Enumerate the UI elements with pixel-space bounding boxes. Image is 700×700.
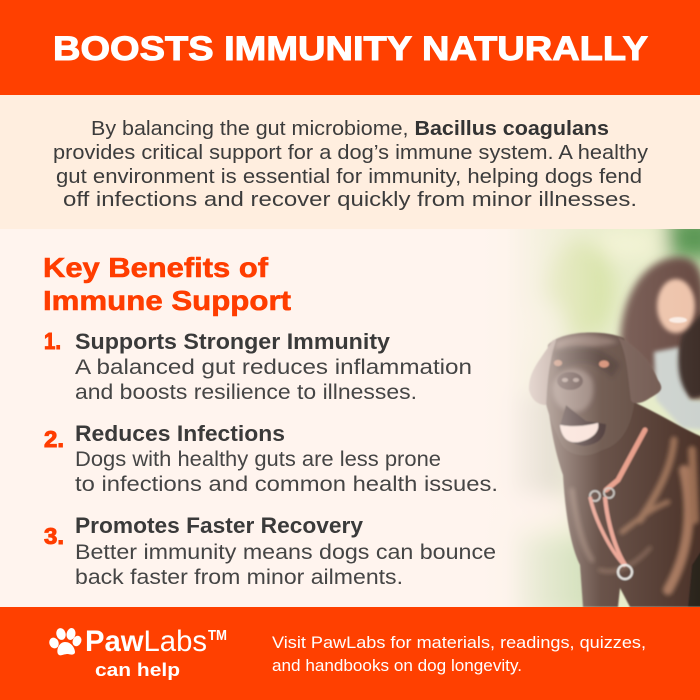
- number 2: 2.: [44, 426, 64, 452]
- leash ring: [618, 565, 632, 579]
- benefit 3 text: back faster from minor ailments.: [75, 566, 403, 589]
- footer banner: [0, 607, 700, 700]
- soft left fade overlay: [480, 229, 700, 607]
- benefits heading: [43, 252, 291, 316]
- dog: [529, 333, 700, 607]
- number 3: 3.: [44, 523, 64, 549]
- benefits heading: Key Benefits of: [43, 252, 269, 283]
- photo: dog with woman in park: [515, 229, 700, 607]
- collar rings: [590, 491, 600, 501]
- benefit 3 text: [75, 541, 496, 589]
- dark hair right: [678, 310, 700, 398]
- title: BOOSTS IMMUNITY NATURALLY: [53, 30, 648, 68]
- benefit 1 text: A balanced gut reduces inflammation: [75, 356, 472, 379]
- PawLabs logo wordmark: PawLabs: [85, 625, 207, 658]
- blurred foliage background: [528, 229, 700, 607]
- benefit 2 text: to infections and common health issues.: [75, 473, 498, 496]
- intro text: By balancing the gut microbiome, Bacillus coagulans: [91, 118, 609, 140]
- brow shading: [553, 346, 620, 378]
- benefit 2 title: Reduces Infections: [75, 421, 285, 446]
- benefit 1 text: [75, 356, 472, 404]
- icon: paw print: [48, 627, 83, 655]
- face: [657, 279, 695, 333]
- forehead highlight: [556, 335, 618, 350]
- benefit 3 title: Promotes Faster Recovery: [75, 513, 364, 538]
- top: [654, 347, 700, 430]
- number 1: 1.: [44, 328, 61, 354]
- woman: [620, 257, 700, 430]
- footer text: and handbooks on dog longevity.: [272, 656, 522, 675]
- benefit 1 title: Supports Stronger Immunity: [75, 329, 391, 354]
- benefit 2 text: Dogs with healthy guts are less prone: [75, 448, 441, 471]
- tongue: [560, 423, 598, 442]
- collar strap: [606, 430, 645, 490]
- benefits heading: Immune Support: [43, 285, 291, 316]
- muzzle: [553, 369, 593, 412]
- benefit 2 text: [75, 448, 498, 496]
- head: [544, 333, 635, 455]
- benefit 3: [44, 513, 496, 589]
- right ear: [618, 337, 661, 403]
- header banner: [0, 0, 700, 95]
- left ear: [529, 340, 556, 405]
- benefit 1 text: and boosts resilience to illnesses.: [75, 381, 417, 404]
- benefit 3 text: Better immunity means dogs can bounce: [75, 541, 496, 564]
- intro panel: [0, 95, 700, 229]
- trademark: TM: [208, 627, 227, 644]
- intro text: provides critical support for a dog’s immune system. A healthy: [53, 142, 648, 164]
- benefit 2: [44, 421, 498, 496]
- hair: [620, 257, 700, 400]
- footer text: Visit PawLabs for materials, readings, quizzes,: [272, 633, 646, 652]
- benefit 1: [44, 328, 472, 404]
- can help: can help: [95, 660, 180, 680]
- open mouth: [560, 405, 606, 446]
- intro text: [53, 118, 648, 211]
- body: [548, 400, 700, 607]
- far leg: [688, 545, 700, 607]
- intro text: gut environment is essential for immunity, helping dogs fend: [56, 166, 642, 188]
- nose: [557, 372, 583, 390]
- intro text: off infections and recover quickly from minor illnesses.: [63, 189, 637, 211]
- leash loops: [590, 497, 625, 566]
- footer text: [272, 633, 646, 675]
- fur highlights: [572, 440, 695, 590]
- smile: [669, 317, 687, 323]
- eyes: [554, 360, 562, 366]
